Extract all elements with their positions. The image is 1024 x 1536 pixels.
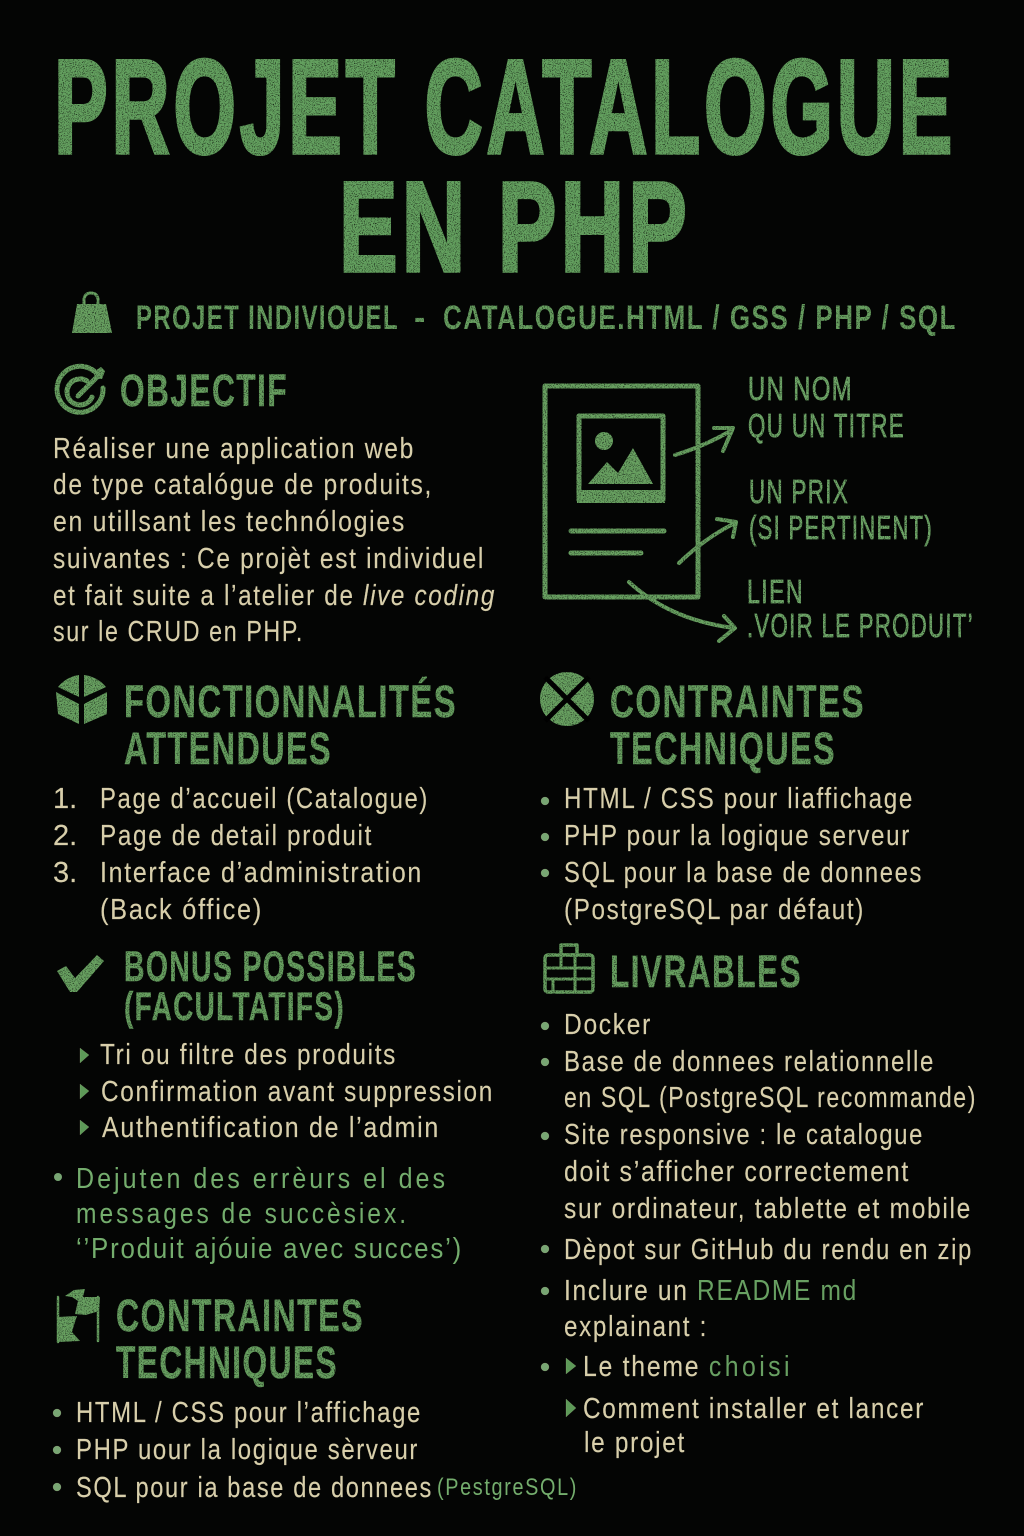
heading: contraintes: CONTRAINTES bbox=[116, 1290, 364, 1341]
numbered list: 3. bbox=[53, 857, 77, 889]
text block: objectif description: de type catalógue de produits, bbox=[53, 469, 433, 501]
label: nom: UN NOM bbox=[748, 370, 853, 407]
icon: cross circle bbox=[540, 672, 594, 726]
numbered list: Page de detail produit bbox=[100, 820, 373, 852]
subtitle text bbox=[136, 299, 957, 337]
icon: cube bbox=[56, 675, 107, 724]
heading: contraintes: CONTRAINTES bbox=[610, 676, 865, 727]
label: prix: UN PRIX bbox=[749, 473, 849, 510]
text block: objectif description bbox=[53, 433, 496, 648]
title: EN PHP bbox=[339, 156, 691, 299]
bullet list: Inclure un README md bbox=[564, 1275, 858, 1307]
bullet list bbox=[541, 783, 923, 926]
panel: fonctionnalités attendues bbox=[53, 675, 457, 926]
bullet list: HTML / CSS pour liaffichage bbox=[564, 783, 914, 815]
label: prix bbox=[749, 473, 933, 546]
bullet list bbox=[53, 1397, 578, 1504]
bullet list: Base de donnees relationnelle bbox=[564, 1046, 935, 1078]
numbered list bbox=[53, 783, 429, 926]
heading: contraintes bbox=[610, 676, 865, 774]
icon: shopping bag bbox=[72, 293, 112, 333]
heading: contraintes: TECHNIQUES bbox=[610, 723, 836, 774]
heading: contraintes bbox=[116, 1290, 364, 1388]
bullet list: explainant : bbox=[564, 1311, 708, 1343]
heading: contraintes: TECHNIQUES bbox=[116, 1337, 338, 1388]
panel: livrables bbox=[541, 945, 977, 1459]
list: bonus items: Authentification de l’admin bbox=[102, 1112, 440, 1144]
icon: document flag bbox=[58, 1289, 100, 1342]
bullet list: SQL pour ia base de donnees bbox=[76, 1472, 433, 1504]
numbered list: 1. bbox=[53, 783, 77, 815]
numbered list: 2. bbox=[53, 820, 77, 852]
numbered list: Interface d’administration bbox=[100, 857, 423, 889]
bullet list: Docker bbox=[564, 1009, 652, 1041]
bullet list: doit s’afficher correctement bbox=[564, 1156, 910, 1188]
text block: messages en vert bbox=[54, 1163, 463, 1265]
heading: bonus: BONUS POSSIBLES bbox=[124, 943, 417, 991]
title bbox=[54, 33, 956, 299]
list: bonus items: Tri ou filtre des produits bbox=[100, 1039, 397, 1071]
panel: product card diagram bbox=[545, 370, 974, 644]
bullet list: Comment installer et lancer bbox=[583, 1393, 925, 1425]
heading: livrables: LIVRABLES bbox=[610, 946, 802, 997]
list: bonus items bbox=[80, 1039, 494, 1144]
text block: objectif description: suivantes : Ce projèt est individuel bbox=[53, 543, 485, 575]
heading: bonus bbox=[124, 943, 417, 1029]
bullet list: PHP pour la logique serveur bbox=[564, 820, 911, 852]
list: bonus items: Confirmation avant suppression bbox=[101, 1076, 494, 1108]
label: prix: (SI PERTINENT) bbox=[749, 509, 933, 546]
bullet list: le projet bbox=[584, 1427, 686, 1459]
bullet list: (PostgreSQL par défaut) bbox=[564, 894, 865, 926]
icon: grid box bbox=[545, 945, 593, 992]
label: lien bbox=[747, 573, 974, 644]
bullet list: Le theme choisi bbox=[583, 1351, 793, 1383]
heading: objectif: OBJECTIF bbox=[120, 365, 288, 416]
heading: fonctionnalités bbox=[124, 676, 457, 774]
subtitle text: PROJET INDIVIOUEL bbox=[136, 299, 399, 337]
bullet list: PHP uour la logique sèrveur bbox=[76, 1434, 419, 1466]
text block: objectif description: sur le CRUD en PHP. bbox=[53, 616, 304, 648]
bullet list: (PestgreSQL) bbox=[437, 1474, 578, 1501]
text block: objectif description: en utillsant les technólogies bbox=[53, 506, 406, 538]
label: nom bbox=[748, 370, 905, 444]
label: nom: QU UN TITRE bbox=[748, 407, 905, 444]
heading: fonctionnalités: FONCTIONNALITÉS bbox=[124, 676, 457, 727]
text block: messages en vert: ‘’Produit ajóuie avec succes’) bbox=[76, 1233, 463, 1265]
subtitle banner bbox=[72, 293, 957, 337]
panel: objectif bbox=[53, 365, 496, 648]
bullet list bbox=[541, 1009, 977, 1459]
heading: bonus: (FACULTATIFS) bbox=[124, 985, 345, 1029]
bullet list: HTML / CSS pour l’affichage bbox=[76, 1397, 422, 1429]
icon: target bbox=[57, 366, 105, 412]
numbered list: Page d’accueil (Catalogue) bbox=[100, 783, 429, 815]
text block: messages en vert: Dejuten des errèurs el des bbox=[76, 1163, 448, 1195]
text block: objectif description: et fait suite a l’atelier de live coding bbox=[53, 580, 496, 612]
bullet list: SQL pour la base de donnees bbox=[564, 857, 923, 889]
numbered list: (Back óffice) bbox=[100, 894, 263, 926]
bullet list: Site responsive : le catalogue bbox=[564, 1119, 924, 1151]
text block: objectif description: Réaliser une application web bbox=[53, 433, 415, 465]
icon: product card with arrows bbox=[545, 386, 736, 641]
panel: bonus possibles bbox=[54, 943, 494, 1265]
icon: check mark bbox=[57, 955, 104, 992]
panel: contraintes techniques (gauche) bbox=[53, 1289, 578, 1504]
label: lien: LIEN bbox=[747, 573, 804, 610]
subtitle text: - bbox=[414, 299, 427, 337]
panel: contraintes techniques (droite) bbox=[540, 672, 923, 926]
heading: fonctionnalités: ATTENDUES bbox=[124, 723, 332, 774]
text block: messages en vert: messages de succèsiex. bbox=[76, 1198, 409, 1230]
